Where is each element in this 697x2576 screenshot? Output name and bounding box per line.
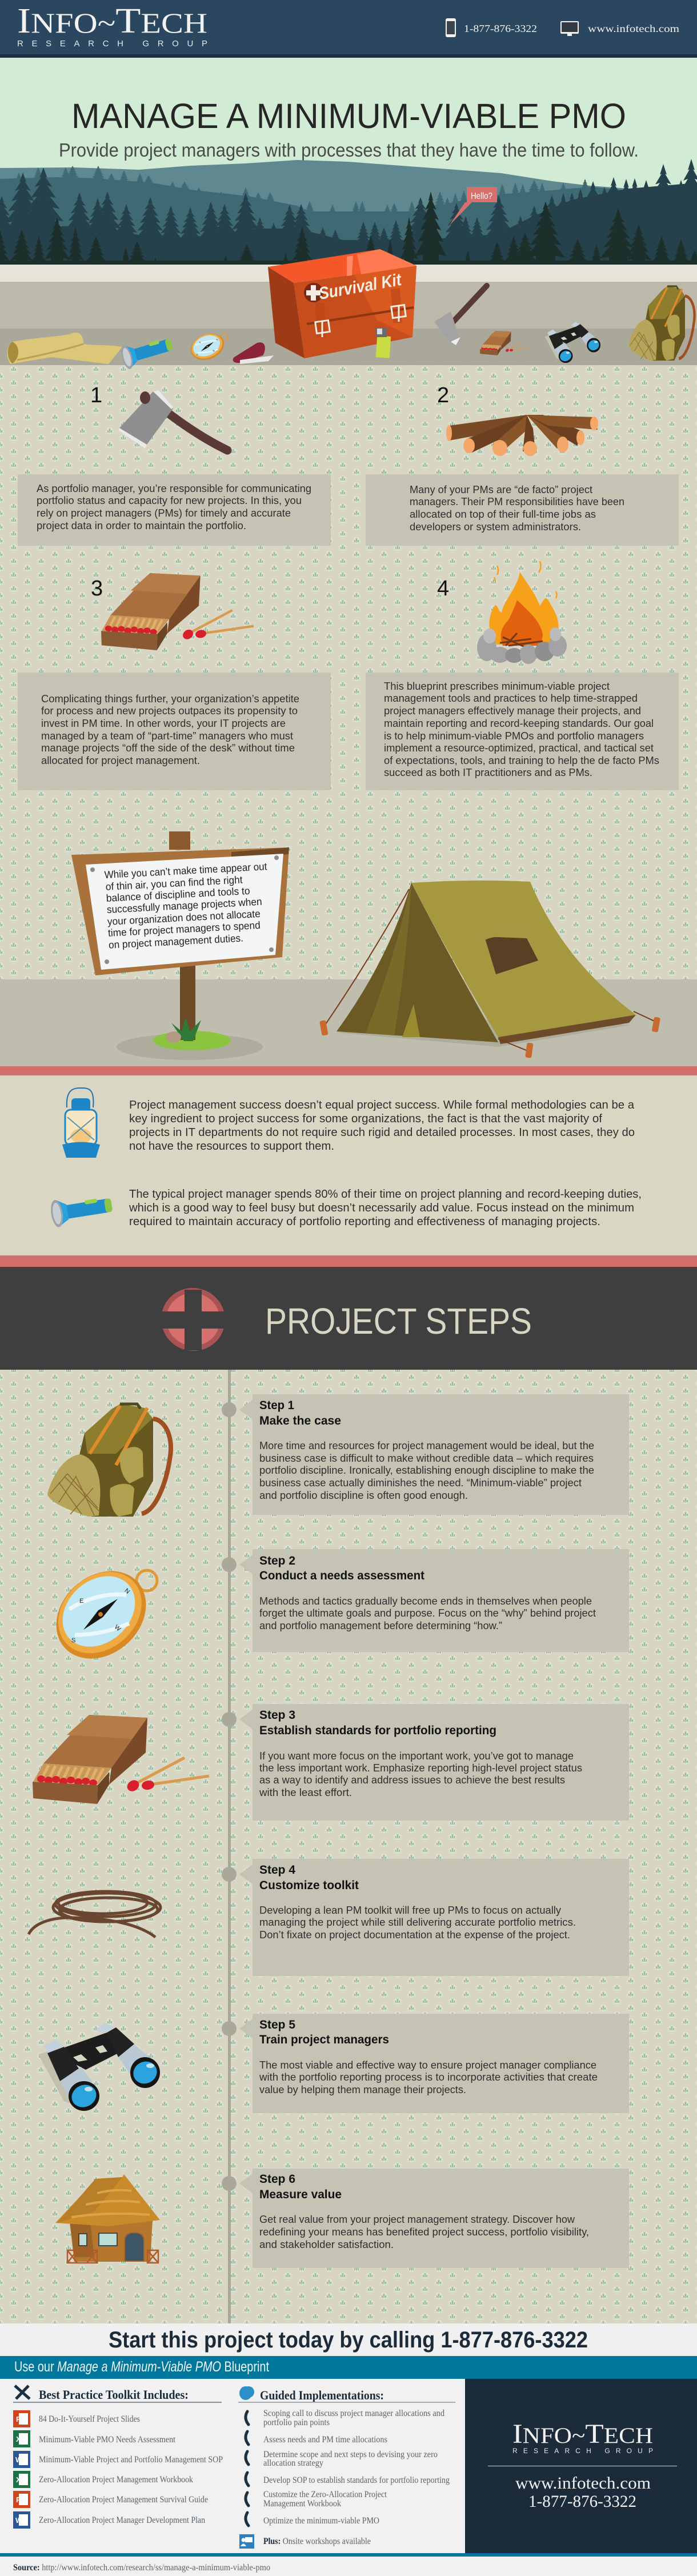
step 6 card: redefining your means has benefited project success, portfolio visibility, bbox=[259, 2226, 589, 2238]
panel: item 4 bbox=[366, 561, 679, 790]
step 1 bbox=[47, 1394, 629, 1517]
source line: Source: http://www.infotech.com/research/ss/manage-a-minimum-viable-pmo bbox=[13, 2563, 270, 2573]
step 4 card: Don’t fixate on project documentation at the expense of the project. bbox=[259, 1929, 570, 1941]
ground strip under sign and tent bbox=[0, 979, 697, 1066]
number 2: 2 bbox=[437, 383, 449, 407]
step 3 card bbox=[239, 1704, 629, 1821]
light resources panel bbox=[0, 2379, 465, 2553]
step 4 bbox=[29, 1859, 629, 1976]
text box 4: succeed as both IT practitioners and as PMs. bbox=[384, 767, 592, 778]
step 4 card bbox=[239, 1859, 629, 1976]
step 1 card: and portfolio discipline is often good enough. bbox=[259, 1490, 468, 1501]
footer bbox=[0, 2553, 697, 2576]
contact panel bbox=[465, 2379, 697, 2553]
item: survival guide: Zero-Allocation Project Management Survival Guide bbox=[39, 2495, 208, 2505]
text box 4: maintain reporting and record-keeping standards. Our goal bbox=[384, 718, 654, 729]
contact phone: 1-877-876-3322 bbox=[528, 2492, 636, 2511]
step 5 card: Train project managers bbox=[259, 2033, 389, 2046]
icon: lantern bbox=[62, 1088, 100, 1158]
icon: phone bbox=[446, 18, 456, 37]
implementation steps: Develop SOP to establish standards for portfolio reporting bbox=[263, 2475, 450, 2485]
number 1: 1 bbox=[90, 383, 102, 407]
number 4: 4 bbox=[437, 577, 449, 601]
step 2 bbox=[39, 1549, 629, 1677]
logo: RESEARCH GROUP bbox=[17, 39, 207, 49]
item: development plan bbox=[13, 2511, 205, 2529]
tent bbox=[319, 881, 660, 1058]
step 3 card: with the least effort. bbox=[259, 1787, 352, 1798]
icon: monitor bbox=[560, 21, 579, 36]
contact logo: INFO~TECH bbox=[512, 2419, 653, 2449]
call icons bbox=[246, 2411, 249, 2526]
icon: binoculars bbox=[38, 2023, 161, 2111]
item: needs assessment: Minimum-Viable PMO Needs Assessment bbox=[39, 2435, 175, 2445]
timeline node bbox=[222, 1867, 237, 1882]
implementation steps: allocation strategy bbox=[263, 2458, 323, 2468]
step 4 card: Customize toolkit bbox=[259, 1879, 359, 1892]
item: workbook bbox=[13, 2471, 193, 2488]
sign text: While you can’t make time appear out bbox=[104, 861, 267, 881]
speech bubble: Hello? bbox=[449, 187, 497, 226]
step 2 card: and portfolio management before determining “how.” bbox=[259, 1620, 502, 1631]
phone number: 1-877-876-3322 bbox=[464, 23, 537, 34]
item: needs assessment bbox=[13, 2430, 175, 2447]
sign text: time for project managers to spend bbox=[107, 919, 261, 939]
step 5 card bbox=[239, 2014, 629, 2113]
step 2 card bbox=[239, 1549, 629, 1652]
text box 2: managers. Their PM responsibilities have been bbox=[410, 496, 624, 507]
step 4 card: managing the project while still delivering accurate portfolio metrics. bbox=[259, 1917, 576, 1928]
paragraph: typical project manager: which is a good way to feel busy but doesn’t necessarily add value. Focus instead on the minimum bbox=[129, 1202, 634, 1214]
step 6 card bbox=[239, 2169, 629, 2268]
text box 4: implement a resource-optimized, practical, and tactical set bbox=[384, 742, 654, 754]
project steps banner bbox=[0, 1267, 697, 1370]
blueprint band bbox=[0, 2356, 697, 2379]
icon: hero axe bbox=[434, 286, 487, 345]
text box 2: allocated on top of their full-time jobs as bbox=[410, 509, 596, 520]
signpost bbox=[71, 831, 289, 1060]
item: 84 slides: P bbox=[16, 2415, 21, 2423]
icon: logs bbox=[446, 415, 598, 456]
icon: hero backpack bbox=[628, 286, 695, 361]
text box 1: portfolio status and capacity for new projects. In this, you bbox=[37, 495, 302, 506]
step 4 card: Step 4 bbox=[259, 1863, 295, 1877]
sign text bbox=[104, 861, 271, 951]
title: MANAGE A MINIMUM-VIABLE PMO bbox=[71, 97, 626, 135]
item: 84 slides: 84 Do-It-Yourself Project Slides bbox=[39, 2414, 140, 2424]
sign text: balance of discipline and tools to bbox=[106, 885, 250, 904]
timeline node bbox=[222, 1557, 237, 1572]
text box 3: managed by a team of “part-time” managers who must bbox=[41, 730, 293, 742]
icon: medical cross bbox=[153, 1279, 234, 1360]
step 5 card: with the portfolio reporting process is to incorporate activities that create bbox=[259, 2071, 598, 2083]
step 1 card: portfolio discipline. Ironically, establishing enough discipline to make the bbox=[259, 1465, 594, 1476]
step 2 card: forget the ultimate goals and purpose. Focus on the “why” behind project bbox=[259, 1607, 596, 1619]
step 5 card: The most viable and effective way to ensure project manager compliance bbox=[259, 2059, 596, 2071]
icon: rope bbox=[29, 1891, 161, 1937]
panel: item 1 bbox=[18, 383, 331, 546]
contact website: www.infotech.com bbox=[515, 2474, 651, 2493]
forest landscape bbox=[0, 159, 697, 265]
item: survival guide: P bbox=[16, 2495, 21, 2504]
icon: backpack bbox=[47, 1404, 171, 1517]
text box 1: As portfolio manager, you’re responsible for communicating bbox=[37, 483, 311, 494]
blueprint band: Use our Manage a Minimum-Viable PMO Blueprint bbox=[14, 2359, 269, 2375]
contact logo: RESEARCH GROUP bbox=[512, 2447, 653, 2455]
step 1 card: Step 1 bbox=[259, 1399, 294, 1412]
implementation steps: Customize the Zero-Allocation Project bbox=[263, 2490, 387, 2499]
implementation steps: Scoping call to discuss project manager allocations and bbox=[263, 2409, 444, 2418]
text box 4: of expectations, tools, and training to help the de facto PMs bbox=[384, 755, 659, 766]
step 6 card: and stakeholder satisfaction. bbox=[259, 2239, 394, 2250]
implementations heading: Guided Implementations: bbox=[260, 2388, 384, 2402]
text box 3 bbox=[18, 673, 331, 790]
text box 2: Many of your PMs are “de facto” project bbox=[410, 484, 592, 495]
implementation steps: Assess needs and PM time allocations bbox=[263, 2435, 387, 2445]
plus line: Plus: Onsite workshops available bbox=[263, 2537, 371, 2546]
step 2 card: Methods and tactics gradually become ends in themselves when people bbox=[259, 1595, 592, 1607]
timeline node bbox=[222, 2176, 237, 2191]
text box 4: management tools and practices to help time-strapped bbox=[384, 693, 638, 704]
step 1 card bbox=[239, 1394, 629, 1515]
step 2 card: Step 2 bbox=[259, 1554, 295, 1567]
icon: survival kit: Survival Kit bbox=[317, 270, 404, 303]
item: management SOP: Minimum-Viable Project and Portfolio Management SOP bbox=[39, 2455, 223, 2465]
call to action band bbox=[0, 2323, 697, 2356]
icon: campfire bbox=[477, 561, 567, 664]
step 2 card: Conduct a needs assessment bbox=[259, 1569, 424, 1582]
icon: map bbox=[7, 333, 122, 364]
item: development plan: W bbox=[15, 2516, 23, 2525]
step 6 bbox=[55, 2169, 629, 2268]
text box 3: manage projects “off the side of the desk” without time bbox=[41, 742, 295, 754]
step 3 bbox=[33, 1704, 629, 1821]
item: workbook: X bbox=[16, 2475, 21, 2484]
timeline node bbox=[222, 2021, 237, 2036]
icon: matchbox bbox=[33, 1715, 209, 1804]
item: development plan: Zero-Allocation Project Manager Development Plan bbox=[39, 2515, 205, 2525]
icon: tools bbox=[15, 2386, 30, 2399]
icon: lighter bbox=[375, 327, 391, 358]
call to action band: Start this project today by calling 1-877-876-3322 bbox=[109, 2327, 588, 2353]
icon: flashlight bbox=[49, 1191, 114, 1228]
timeline node bbox=[222, 1402, 237, 1417]
text box 2 bbox=[366, 474, 679, 546]
timeline line bbox=[228, 1370, 231, 2323]
text box 4 bbox=[366, 673, 679, 790]
header bar bbox=[0, 0, 697, 58]
icon: axe bbox=[118, 390, 227, 450]
toolkit heading: Best Practice Toolkit Includes: bbox=[39, 2387, 189, 2402]
step 3 card: as a way to identify and address issues to achieve the best results bbox=[259, 1774, 565, 1786]
text box 3: invest in PM time. In other words, your IT projects are bbox=[41, 718, 286, 729]
step 1 card: More time and resources for project management would be ideal, but the bbox=[259, 1440, 594, 1451]
text box 2: developers or system administrators. bbox=[410, 521, 581, 533]
icon: workshop bbox=[239, 2534, 254, 2549]
paragraph: project management success: Project management success doesn’t equal project success. While formal methodologies can be a bbox=[129, 1099, 635, 1111]
step 4 card: Developing a lean PM toolkit will free up PMs to focus on actually bbox=[259, 1905, 561, 1916]
step 6 card: Get real value from your project management strategy. Discover how bbox=[259, 2214, 575, 2225]
sign text: on project management duties. bbox=[109, 932, 243, 951]
sign text: your organization does not allocate bbox=[107, 908, 261, 927]
sign text: of thin air, you can find the right bbox=[105, 874, 243, 893]
icon: pocket knife bbox=[233, 342, 274, 364]
paragraph: project management success: key ingredient to project success for some organizations, the fact is that the vast majority of bbox=[129, 1113, 602, 1125]
icon: hero matchbox bbox=[480, 331, 528, 355]
implementation steps: Management Workbook bbox=[263, 2499, 341, 2509]
implementation steps: Determine scope and next steps to devising your zero bbox=[263, 2450, 438, 2459]
text box 4: is to help minimum-viable PMOs and portfolio managers bbox=[384, 730, 644, 742]
subtitle: Provide project managers with processes that they have the time to follow. bbox=[59, 139, 639, 161]
step 5 bbox=[38, 2014, 629, 2113]
panel: insight band bbox=[0, 1066, 697, 1267]
icon: survival kit bbox=[268, 249, 416, 358]
guided implementations list bbox=[238, 2386, 455, 2549]
text box 4: This blueprint prescribes minimum-viable project bbox=[384, 681, 610, 692]
step 1 card: business case is difficult to make without credible data – which requires bbox=[259, 1453, 594, 1464]
item: management SOP: W bbox=[15, 2455, 23, 2464]
step 5 card: value by helping them manage their projects. bbox=[259, 2084, 466, 2095]
implementation steps bbox=[263, 2409, 450, 2526]
icon: chat bubbles bbox=[239, 2386, 254, 2400]
step 5 card: Step 5 bbox=[259, 2018, 295, 2031]
toolkit list bbox=[13, 2386, 223, 2529]
number 3: 3 bbox=[91, 577, 103, 601]
icon: hero compass bbox=[185, 329, 231, 365]
icon: matchbox bbox=[101, 573, 254, 650]
step 6 card: Step 6 bbox=[259, 2173, 295, 2186]
item: needs assessment: X bbox=[16, 2435, 21, 2443]
text box 4: project managers effectively manage their projects, and bbox=[384, 705, 641, 717]
text box 3: Complicating things further, your organization’s appetite bbox=[41, 693, 299, 705]
heading: PROJECT STEPS bbox=[265, 1301, 532, 1342]
step 3 card: Step 3 bbox=[259, 1709, 295, 1722]
sign text: successfully manage projects when bbox=[106, 896, 262, 915]
step 3 card: If you want more focus on the important work, you’ve got to manage bbox=[259, 1750, 574, 1762]
text box 1 bbox=[18, 474, 331, 546]
item: workbook: Zero-Allocation Project Management Workbook bbox=[39, 2475, 193, 2485]
panel: item 3 bbox=[18, 573, 331, 790]
icon: hero binoculars bbox=[544, 322, 600, 363]
implementation steps: portfolio pain points bbox=[263, 2418, 330, 2427]
icon: hero flashlight bbox=[118, 332, 176, 371]
item: management SOP bbox=[13, 2451, 223, 2468]
paragraph: typical project manager: The typical project manager spends 80% of their time on project planning and record-keeping duties, bbox=[129, 1188, 642, 1201]
paragraph: project management success: not have the resources to support them. bbox=[129, 1140, 334, 1153]
implementation steps: Optimize the minimum-viable PMO bbox=[263, 2516, 379, 2526]
paragraph: project management success bbox=[129, 1099, 635, 1153]
text box 1: rely on project managers (PMs) for timely and accurate bbox=[37, 507, 291, 519]
ground bands bbox=[0, 265, 697, 365]
paragraph: project management success: projects in IT departments do not require such rigid and detailed processes. In most cases, they do bbox=[129, 1126, 635, 1139]
panel: item 2 bbox=[366, 383, 679, 546]
step 3 card: the less important work. Emphasize reporting high-level project status bbox=[259, 1762, 582, 1774]
logo: INFO~ TECH bbox=[17, 2, 207, 41]
speech bubble: Hello?: Hello? bbox=[471, 191, 492, 201]
item: survival guide bbox=[13, 2491, 208, 2508]
icon: hut bbox=[55, 2174, 160, 2263]
paragraph: typical project manager bbox=[129, 1188, 642, 1228]
text box 1: project data in order to maintain the portfolio. bbox=[37, 520, 246, 531]
step 6 card: Measure value bbox=[259, 2188, 342, 2201]
website: www.infotech.com bbox=[588, 23, 679, 34]
patterned background sections bbox=[0, 365, 697, 2323]
text box 3: for process and new projects outpaces its propensity to bbox=[41, 705, 298, 717]
hero sky bbox=[0, 58, 697, 265]
step 1 card: business case actually diminishes the need. “Minimum-viable” project bbox=[259, 1477, 582, 1489]
item: 84 slides bbox=[13, 2410, 140, 2427]
step 1 card: Make the case bbox=[259, 1414, 341, 1427]
paragraph: typical project manager: required to maintain accuracy of portfolio reporting and effectiveness of managing projects. bbox=[129, 1215, 600, 1228]
timeline node bbox=[222, 1712, 237, 1727]
icon: compass bbox=[39, 1553, 163, 1677]
text box 3: allocated for project management. bbox=[41, 755, 200, 766]
step 3 card: Establish standards for portfolio reporting bbox=[259, 1724, 496, 1737]
